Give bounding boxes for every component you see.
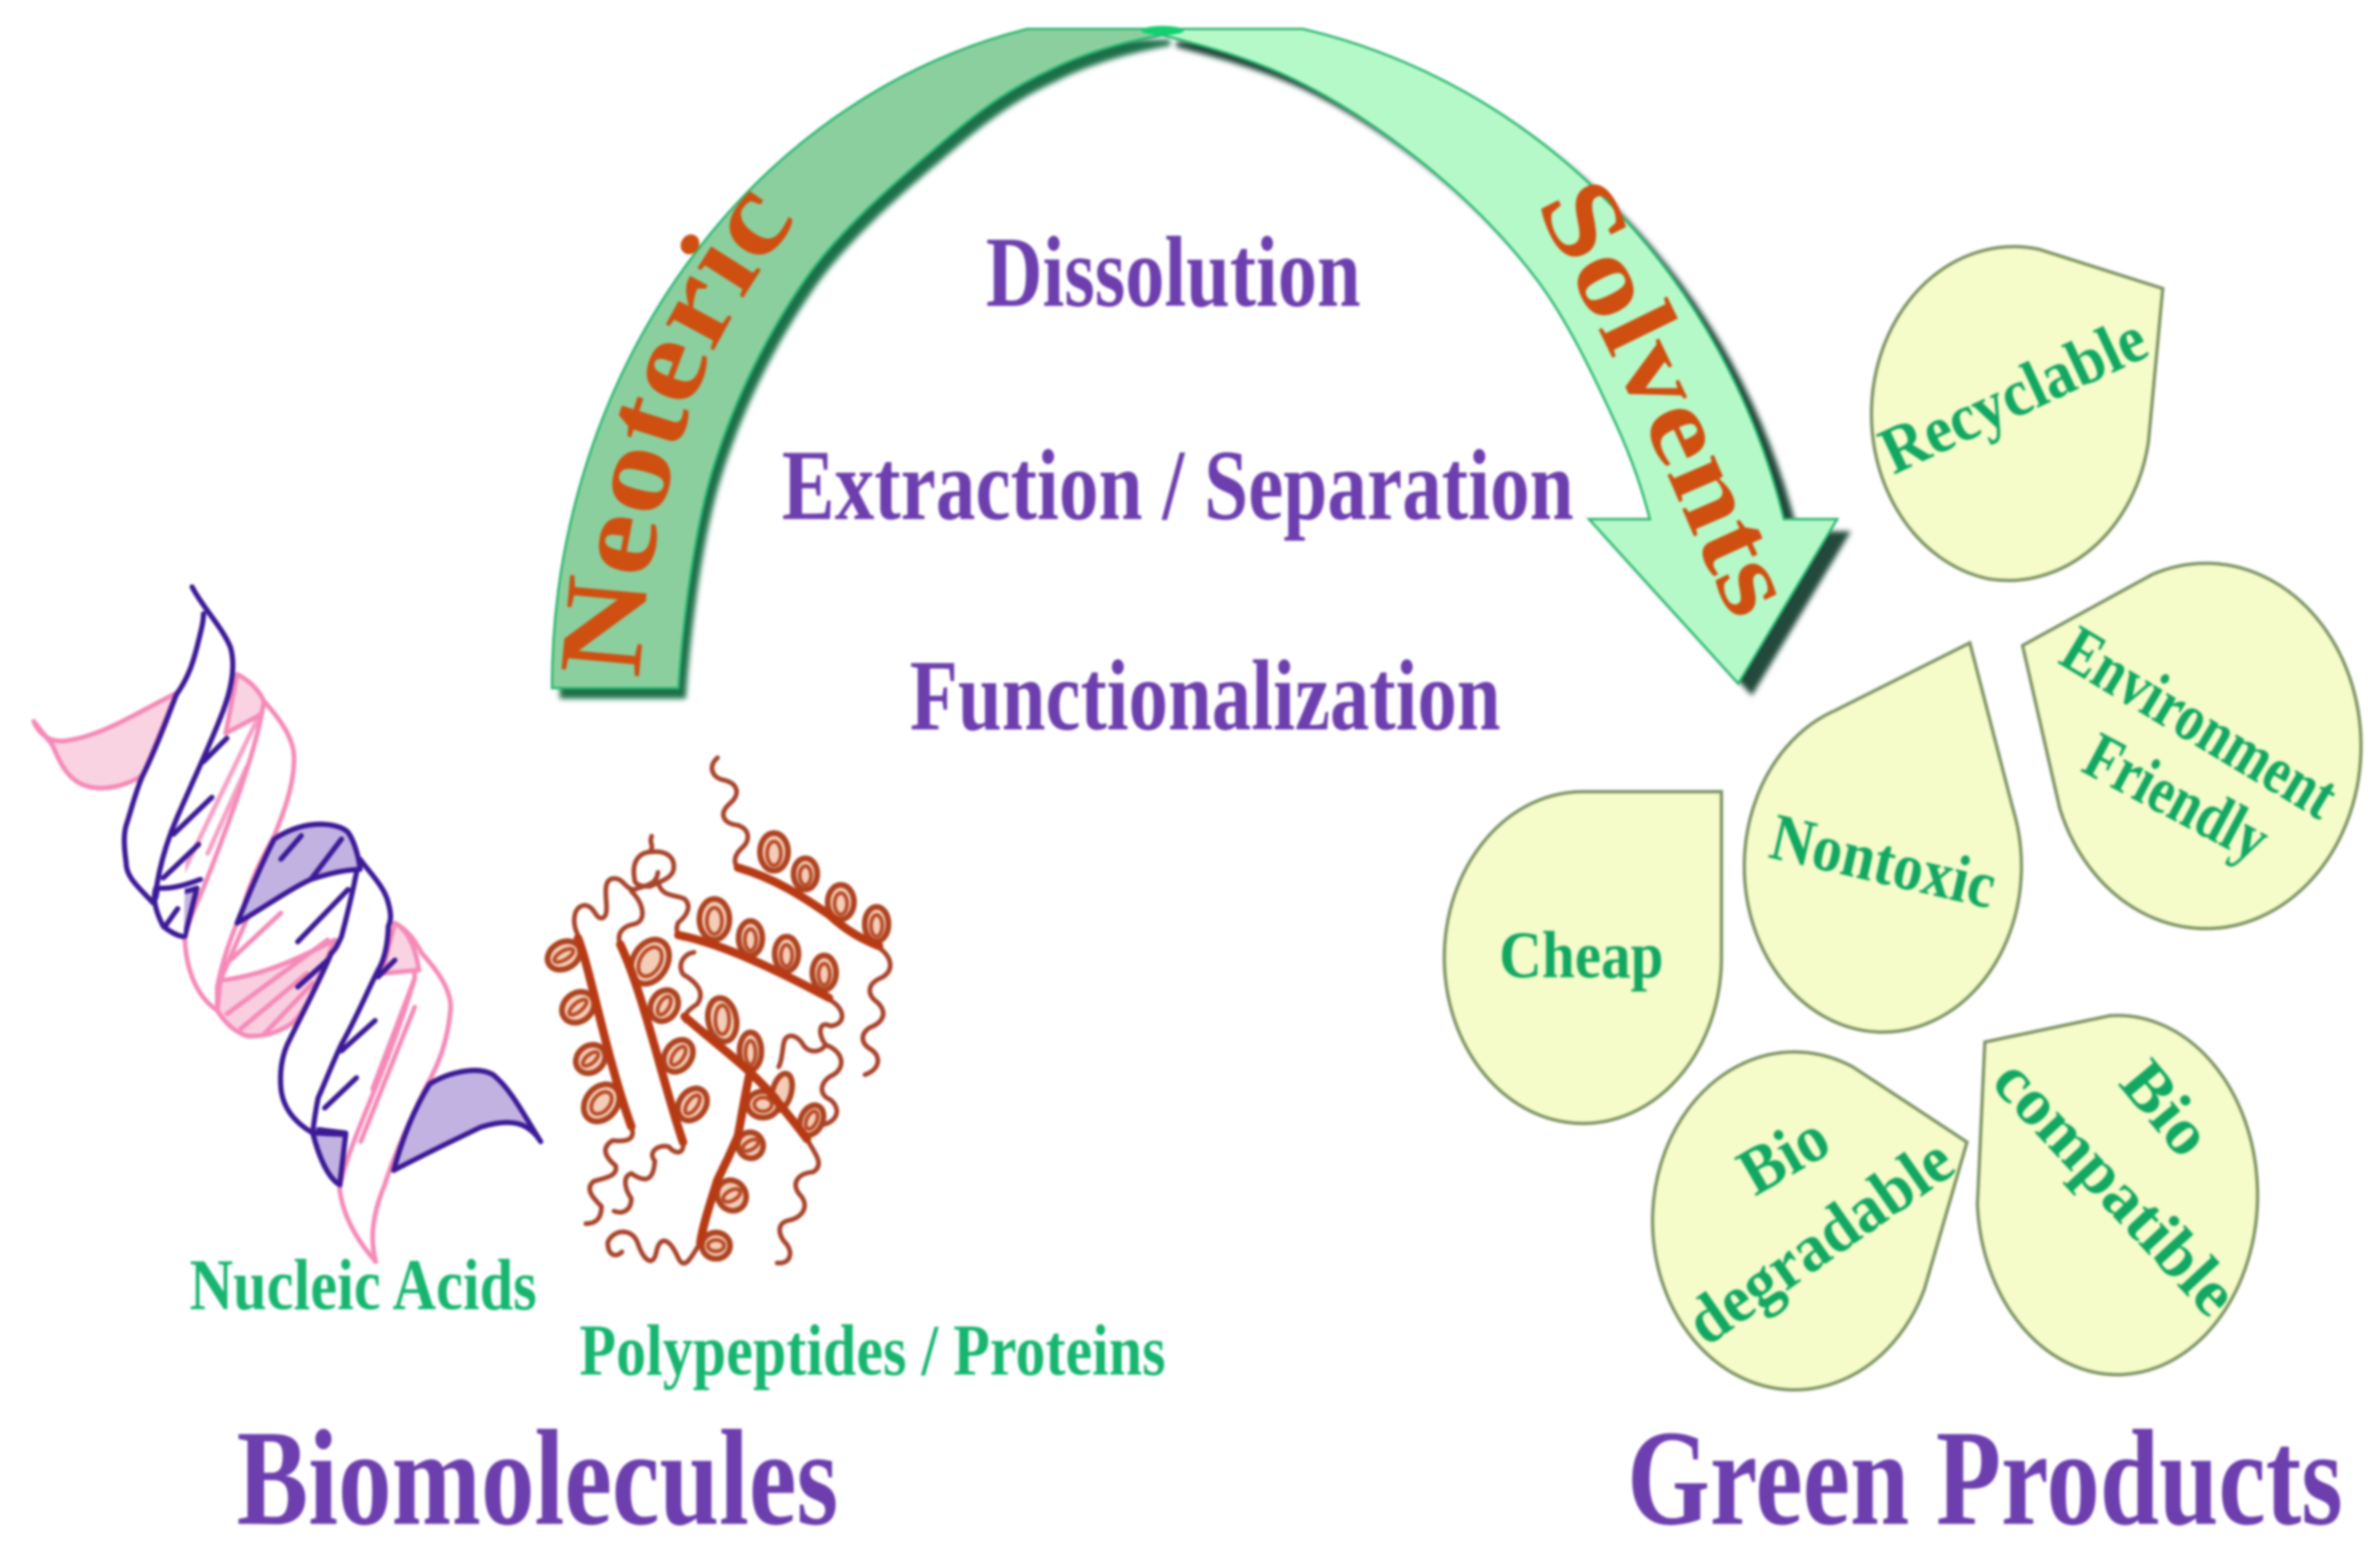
drop: Recyclable: Recyclable <box>1869 302 2158 488</box>
arrow apex highlight <box>1141 25 1184 35</box>
purple rungs upper <box>156 738 227 925</box>
purple strand upper <box>124 587 233 936</box>
pink shaded fold <box>217 940 335 1036</box>
purple tail ribbon <box>394 1070 540 1171</box>
label: Neoteric: Neoteric <box>560 190 795 678</box>
process: Functionalization: Functionalization <box>909 641 1501 752</box>
process: Dissolution: Dissolution <box>986 217 1360 328</box>
purple band middle <box>237 824 360 923</box>
helix backbones <box>578 868 879 1242</box>
pink rungs upper <box>181 714 260 877</box>
drop: Biodegradable: Bio <box>1726 1100 1841 1209</box>
alpha helix coils <box>542 833 889 1259</box>
arrow right band and head <box>1163 29 1837 683</box>
icon: DNA double helix <box>34 587 540 1262</box>
purple rungs lower <box>281 836 394 1133</box>
drop: Biocompatible: compatible <box>1978 1044 2252 1330</box>
curved arrow: neoteric solvents <box>549 24 1855 704</box>
drop: Recyclable <box>1849 220 2173 607</box>
pink cap <box>226 674 265 733</box>
pink tail ribbon <box>34 693 176 788</box>
label: Polypeptides / Proteins: Polypeptides / Proteins <box>579 1310 1166 1391</box>
random coil loops <box>574 758 891 1263</box>
drop: Biodegradable: degradable <box>1673 1123 1967 1360</box>
label: Solvents: Solvents <box>1540 183 1777 617</box>
arrow left band shadow <box>559 40 1170 698</box>
pink cap lower <box>381 923 419 973</box>
icon: polypeptide protein <box>542 758 891 1263</box>
arrow left band <box>552 29 1163 688</box>
drop: Cheap <box>1444 792 1721 1124</box>
purple fold bottom <box>313 1133 346 1185</box>
drop: Cheap: Cheap <box>1499 919 1664 992</box>
drop: Nontoxic: Nontoxic <box>1763 800 2002 923</box>
label: Nucleic Acids: Nucleic Acids <box>189 1244 537 1325</box>
drop: Biocompatible: Bio <box>2106 1047 2227 1171</box>
pink ribbon upper <box>185 701 294 1011</box>
process list <box>782 217 1574 752</box>
pink rungs <box>220 879 414 1142</box>
purple fold lower <box>156 888 197 936</box>
process: Extraction / Separation: Extraction / Separation <box>782 431 1574 542</box>
drop: Biodegradable <box>1607 998 1982 1444</box>
drop: Nontoxic <box>1703 643 2067 1079</box>
drop: Environment Friendly <box>2006 512 2380 980</box>
heading: Biomolecules: Biomolecules <box>236 1402 838 1554</box>
arrow right band shadow <box>1176 41 1851 696</box>
pink ribbon lower <box>340 923 451 1262</box>
drop: Biocompatible <box>1970 1006 2265 1384</box>
drop: Environment Friendly: Friendly <box>2072 719 2281 876</box>
purple strand middle <box>281 859 391 1133</box>
